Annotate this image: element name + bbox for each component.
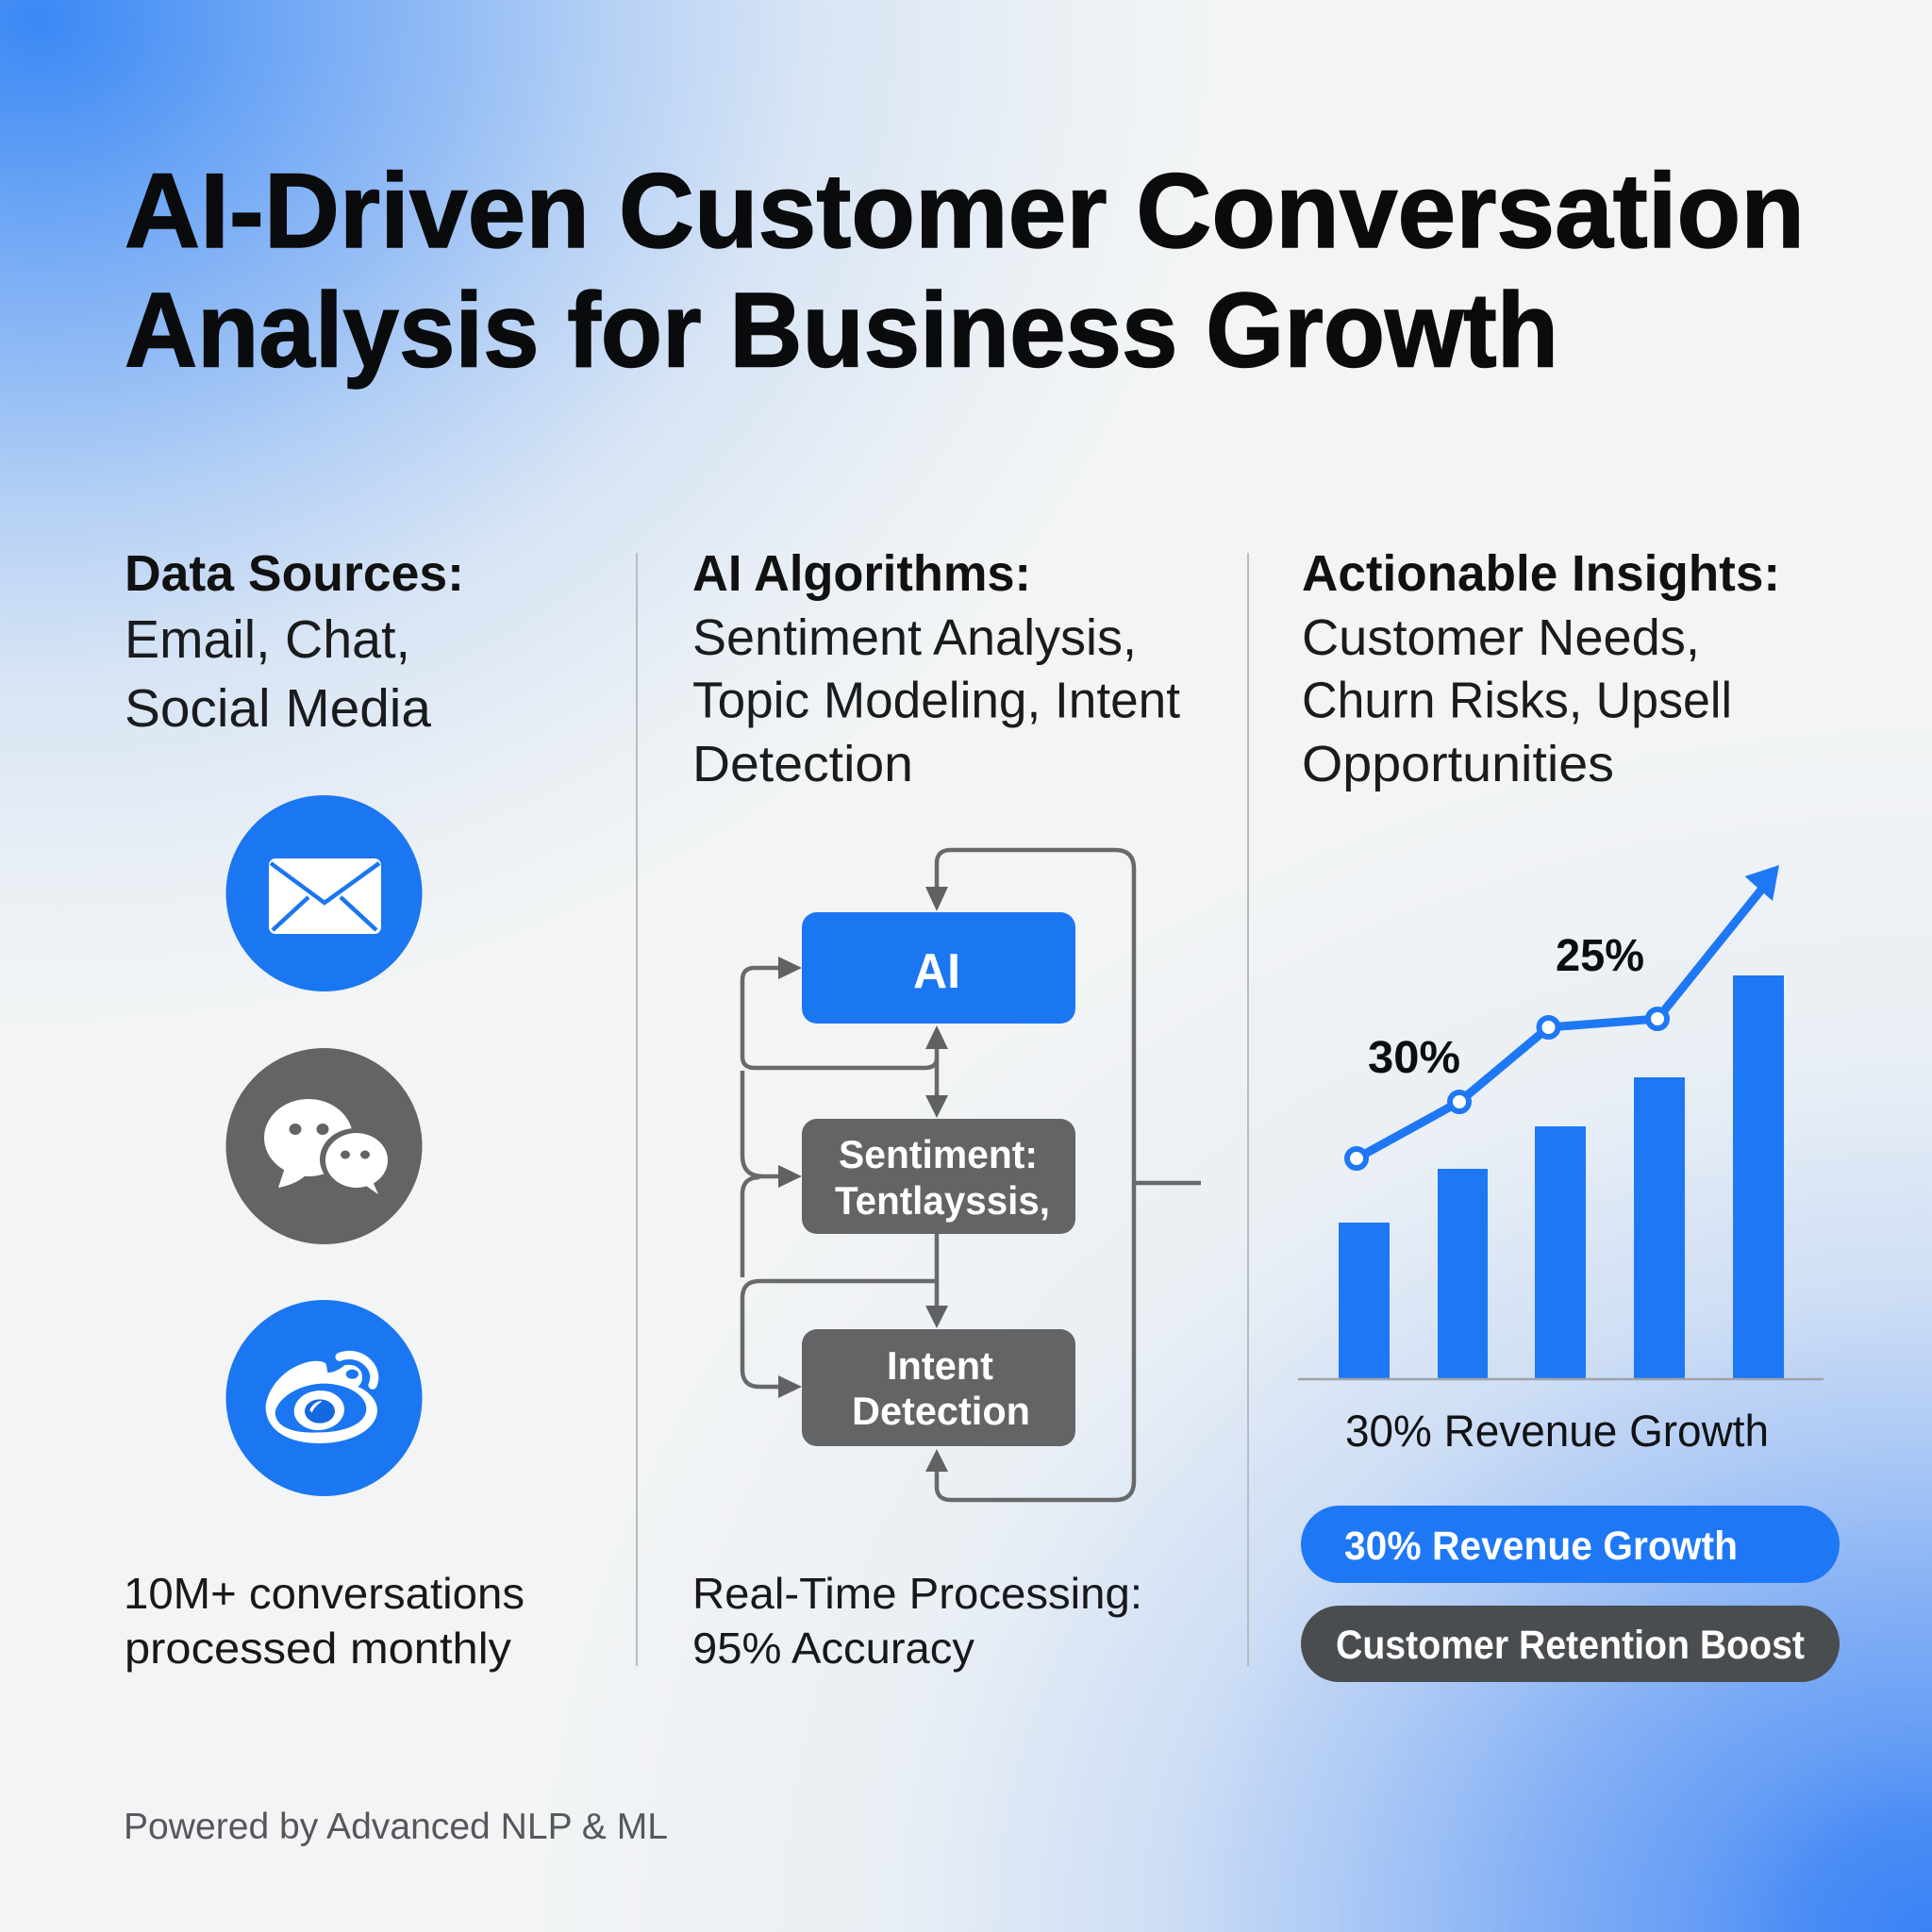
text: conversations stat — [124, 1569, 525, 1673]
box: sentiment: Sentiment: — [839, 1132, 1038, 1176]
box: intent detection: Intent — [887, 1343, 993, 1388]
title: AI-Driven Customer Conversation — [125, 152, 1805, 270]
text: algorithms list: Sentiment Analysis, — [692, 609, 1137, 666]
label: 25%: 25% — [1556, 931, 1644, 981]
box: intent detection — [802, 1329, 1075, 1446]
panel: actionable insights — [1298, 545, 1840, 1682]
box: sentiment — [802, 1119, 1075, 1234]
pill: revenue growth — [1301, 1506, 1840, 1583]
title: Analysis for Business Growth — [125, 272, 1558, 389]
icon: email — [226, 795, 423, 991]
arrows: connectors — [742, 850, 1201, 1500]
text: data sources list: Social Media — [125, 678, 431, 739]
text: real-time processing — [692, 1569, 1142, 1673]
text: conversations stat: 10M+ conversations — [124, 1569, 525, 1618]
text: insights list — [1302, 609, 1732, 792]
arrowheads — [778, 887, 948, 1472]
panel: data sources — [124, 545, 525, 1673]
heading: AI algorithms: AI Algorithms: — [692, 545, 1031, 602]
text: real-time processing: 95% Accuracy — [692, 1624, 974, 1673]
text: algorithms list — [692, 609, 1180, 792]
label: 30%: 30% — [1368, 1033, 1460, 1083]
flow diagram — [742, 850, 1201, 1500]
bar chart — [1298, 865, 1824, 1379]
text: insights list: Churn Risks, Upsell — [1302, 672, 1732, 728]
box: intent detection: Detection — [852, 1389, 1030, 1433]
pill: revenue growth: 30% Revenue Growth — [1344, 1524, 1738, 1569]
icon: weibo — [226, 1300, 423, 1496]
line trend with arrow — [1347, 865, 1779, 1168]
heading: actionable insights: Actionable Insights: — [1302, 545, 1780, 602]
box: AI: AI — [913, 944, 960, 999]
text: conversations stat: processed monthly — [125, 1624, 511, 1673]
box: sentiment: Tentlayssis, — [835, 1178, 1050, 1223]
icon: chat — [226, 1048, 423, 1244]
text: algorithms list: Detection — [692, 736, 913, 792]
text: insights list: Customer Needs, — [1302, 609, 1700, 666]
text: real-time processing: Real-Time Processing: — [692, 1569, 1142, 1618]
heading: data sources: Data Sources: — [125, 545, 464, 602]
box: AI — [802, 912, 1075, 1024]
text: data sources list: Email, Chat, — [125, 609, 410, 670]
panel: AI algorithms — [692, 545, 1201, 1673]
chart caption: 30% Revenue Growth — [1345, 1406, 1769, 1456]
text: data sources list — [125, 609, 431, 739]
title — [125, 152, 1805, 389]
pill: customer retention: Customer Retention Boost — [1336, 1623, 1805, 1668]
text: algorithms list: Topic Modeling, Intent — [692, 672, 1180, 728]
pill: customer retention — [1301, 1606, 1840, 1682]
footer: Powered by Advanced NLP & ML — [124, 1807, 668, 1847]
text: insights list: Opportunities — [1302, 736, 1614, 792]
